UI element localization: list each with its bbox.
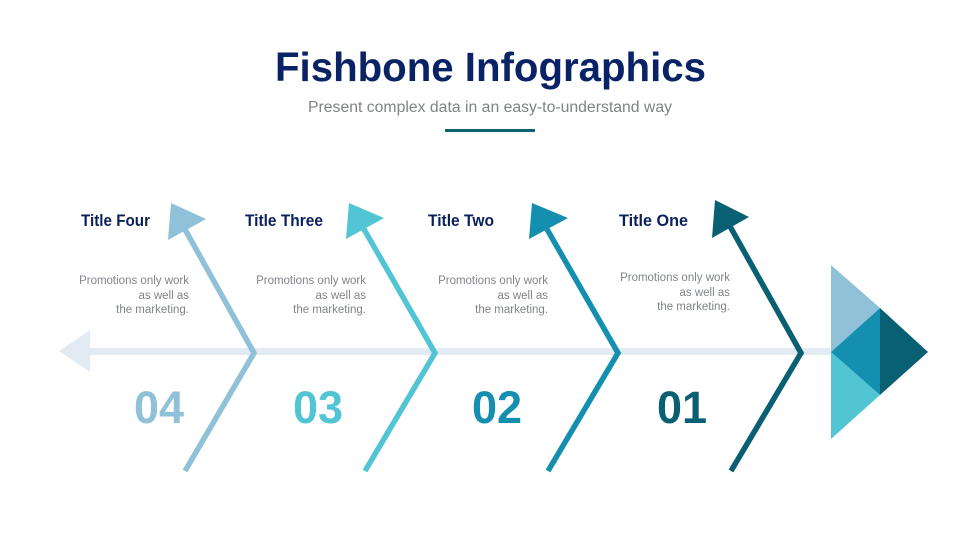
bone 03 description: Promotions only work — [256, 275, 366, 287]
bone 04 description: as well as — [138, 290, 189, 302]
fishbone spine with tail arrow — [59, 330, 832, 372]
bone 04 — [79, 203, 254, 471]
bone 02 number: 02 — [472, 382, 522, 433]
bone 02 description: as well as — [498, 290, 548, 302]
bone 01 arrowhead — [712, 200, 749, 238]
title: Fishbone Infographics — [275, 44, 706, 90]
bone 04 title: Title Four — [81, 212, 151, 230]
bone 01 number: 01 — [657, 382, 707, 433]
bone 04 arrowhead — [168, 203, 206, 240]
title underline — [445, 129, 535, 132]
bone 03 description: the marketing. — [293, 304, 366, 316]
bone 02 title: Title Two — [428, 212, 494, 230]
bone 01 description: the marketing. — [657, 301, 730, 313]
bone 02 description: the marketing. — [475, 304, 548, 316]
bone 03 arrowhead — [346, 203, 384, 239]
bone 04 number: 04 — [134, 382, 184, 433]
subtitle: Present complex data in an easy-to-understand way — [308, 99, 672, 116]
bone 01 — [619, 200, 801, 471]
bone 04 description: the marketing. — [116, 304, 189, 316]
icon: fish head — [831, 265, 928, 439]
bone 02 chevron — [544, 224, 618, 471]
bone 03 — [245, 203, 435, 471]
bone 01 title: Title One — [619, 212, 688, 230]
bone 04 chevron — [182, 224, 254, 471]
bone 01 chevron — [727, 221, 801, 471]
bone 02 arrowhead — [529, 203, 568, 239]
bone 03 description: as well as — [316, 290, 366, 302]
bone 04 description: Promotions only work — [79, 275, 189, 287]
bone 03 title: Title Three — [245, 212, 323, 230]
bone 02 — [428, 203, 618, 471]
bone 02 description: Promotions only work — [438, 275, 548, 287]
bone 03 chevron — [361, 224, 435, 471]
bone 01 description: as well as — [680, 287, 730, 299]
bone 03 number: 03 — [293, 382, 343, 433]
bone 01 description: Promotions only work — [620, 272, 730, 284]
